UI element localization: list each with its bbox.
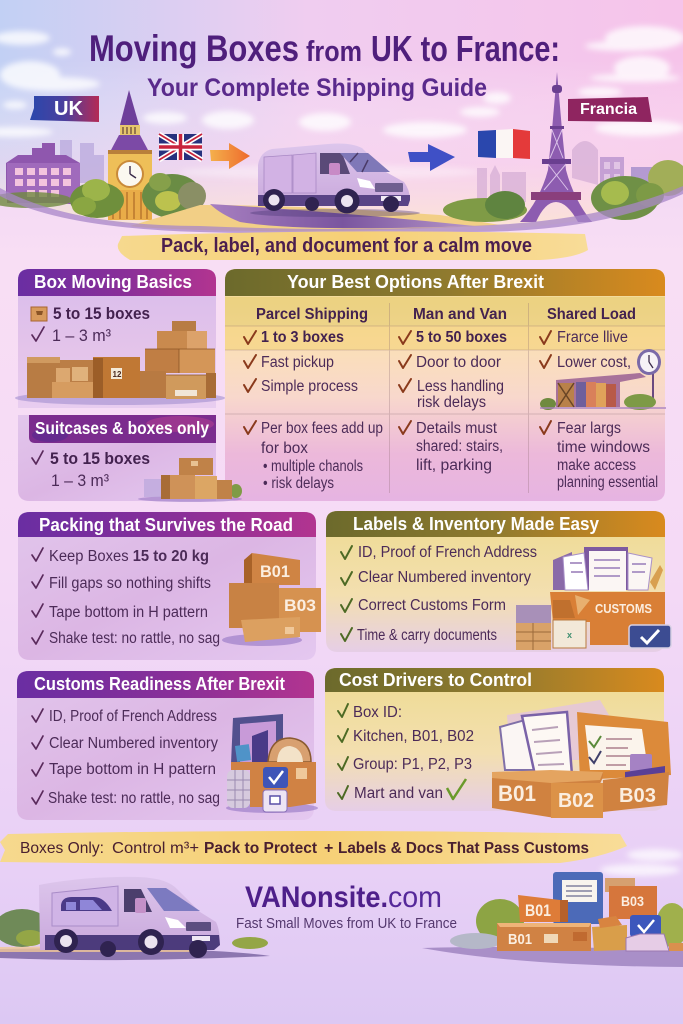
illustration: footer boxes and documents: [450, 872, 683, 951]
panel: Customs Readiness After Brexit: [17, 671, 318, 820]
checklist: Tape bottom in H pattern: [49, 761, 216, 778]
swoosh: [0, 186, 683, 234]
heading: [17, 671, 314, 698]
text: volume: 1 – 3 m³: [51, 471, 109, 490]
summary band: [0, 831, 627, 864]
illustration: labelled boxes: B01: [260, 562, 290, 581]
checklist: Mart and van: [354, 785, 443, 802]
icon: Eiffel Tower: [520, 72, 592, 222]
checklist: Keep Boxes 15 to 20 kg: [49, 548, 209, 565]
text: 5 to 15 boxes: 5 to 15 boxes: [53, 305, 150, 323]
column: Shared Load: Fear largs: [557, 420, 621, 437]
title: Moving Boxes: [89, 28, 299, 69]
checklist: Tape bottom in H pattern: [49, 604, 208, 621]
checklist: Correct Customs Form: [358, 597, 506, 614]
heading: Customs Readiness After Brexit: [34, 674, 285, 694]
column: Parcel Shipping: Simple process: [261, 378, 358, 395]
subtitle: Your Complete Shipping Guide: [147, 74, 487, 102]
checklist: Clear Numbered inventory: [49, 735, 218, 752]
panel: Labels and Inventory Made Easy: [326, 511, 671, 652]
column: Man and Van: Man and Van: [413, 306, 507, 323]
illustration: customs box: x: [567, 630, 572, 640]
summary band: Pack to Protect: [204, 840, 318, 857]
column: Man and Van: 5 to 50 boxes: [416, 329, 507, 346]
brand: VANonsite.com: com: [388, 881, 442, 914]
column: Man and Van: shared: stairs,: [416, 438, 503, 455]
banner: UK: [30, 96, 99, 122]
tagline band: Pack, label, and document for a calm move: [161, 235, 532, 257]
banner: UK: UK: [54, 98, 84, 120]
column: Parcel Shipping: Fast pickup: [261, 354, 334, 371]
column: Man and Van: Details must: [416, 420, 498, 437]
title: [89, 28, 560, 69]
illustration: footer boxes and documents: B01: [525, 901, 551, 920]
hero scene: [0, 0, 683, 234]
title: from: [306, 36, 362, 68]
heading: Box Moving Basics: [34, 272, 192, 292]
summary band: Labels & Docs That Pass Customs: [338, 840, 589, 857]
skyline: Paris rooftops: [477, 141, 657, 202]
illustration: paperwork and boxes: B01: [498, 781, 536, 806]
checklist: Shake test: no rattle, no sag: [49, 630, 220, 647]
brand: VANonsite.com: VANonsite.: [245, 881, 388, 914]
column: Shared Load: time windows: [557, 439, 650, 456]
checklist: ID, Proof of French Address: [49, 708, 217, 725]
column: Parcel Shipping: [244, 306, 383, 492]
column: Parcel Shipping: Per box fees add up: [261, 420, 383, 437]
heading: [29, 415, 216, 443]
illustration: footer boxes and documents: B03: [621, 893, 644, 909]
illustration: paperwork and boxes: [492, 700, 671, 818]
column: Shared Load: planning essential: [557, 474, 658, 491]
column: Shared Load: make access: [557, 457, 636, 474]
icon: large green check: [447, 779, 466, 799]
text: boxes count: 5 to 15 boxes: [50, 450, 150, 468]
skyline: distant towers left: [60, 140, 104, 185]
column: Shared Load: Shared Load: [547, 306, 636, 323]
illustration: small boxes: [138, 458, 242, 502]
column: Parcel Shipping: Parcel Shipping: [256, 306, 368, 323]
checklist: [32, 708, 220, 807]
heading: [326, 511, 665, 537]
arrow: orange: [210, 143, 250, 169]
checklist: Group: P1, P2, P3: [353, 756, 472, 773]
checklist: Fill gaps so nothing shifts: [49, 575, 211, 592]
heading: [225, 269, 665, 296]
checklist: [338, 704, 474, 802]
heading: Your Best Options After Brexit: [287, 271, 544, 292]
illustration: customs box: CUSTOMS: [595, 602, 652, 616]
icon: UK flag: [159, 134, 202, 160]
illustration: box pile: 12: [112, 370, 122, 379]
tagline band: [118, 231, 588, 260]
column header band: [225, 297, 665, 326]
column: Man and Van: Door to door: [416, 354, 501, 371]
panel: Box Moving Basics: [15, 269, 225, 408]
illustration: customs kit: [226, 714, 318, 813]
column: Shared Load: Frarce llive: [557, 329, 628, 346]
panel: Cost Drivers to Control: [325, 668, 671, 818]
checklist: Time & carry documents: [357, 627, 497, 644]
van: hero: [250, 144, 420, 217]
heading: [18, 269, 216, 296]
column: Man and Van: risk delays: [417, 394, 486, 411]
illustration: box pile: [15, 321, 225, 405]
banner: Francia: [568, 97, 652, 122]
trees right: [443, 160, 683, 222]
checklist: Shake test: no rattle, no sag: [48, 790, 220, 807]
heading: [325, 668, 664, 692]
illustration: paperwork and boxes: B03: [619, 785, 656, 807]
checklist: [341, 544, 537, 644]
column: Parcel Shipping: • multiple chanols: [263, 458, 363, 475]
building: purple townhouse: [6, 143, 80, 205]
row band: [225, 326, 665, 350]
illustration: labelled boxes: [222, 553, 321, 646]
icon: clock tower: [108, 90, 152, 220]
column: Parcel Shipping: for box: [261, 440, 308, 457]
summary band: +: [324, 840, 333, 857]
icon: small box: [31, 307, 47, 321]
column: Parcel Shipping: 1 to 3 boxes: [261, 329, 344, 346]
footer clouds and ground: [0, 849, 683, 967]
heading: Packing that Survives the Road: [39, 515, 293, 535]
checklist: Box ID:: [353, 704, 402, 721]
icon: French flag: [478, 129, 530, 159]
heading: Labels & Inventory Made Easy: [353, 514, 599, 534]
panel: Suitcases and boxes only: [18, 415, 242, 502]
checklist: Clear Numbered inventory: [358, 569, 531, 586]
illustration: customs box: [516, 547, 671, 650]
illustration: footer boxes and documents: B01: [508, 931, 532, 948]
banner: Francia: Francia: [580, 101, 637, 118]
heading: Suitcases & boxes only: [35, 418, 209, 438]
illustration: warehouse and clock: [540, 349, 666, 410]
checklist: [32, 548, 220, 647]
column: Man and Van: Less handling: [417, 378, 504, 395]
illustration: labelled boxes: B03: [284, 596, 316, 615]
checklist: ID, Proof of French Address: [358, 544, 537, 561]
text: 1 to 3 m3: 1 – 3 m³: [52, 326, 111, 345]
column: Man and Van: lift, parking: [416, 457, 492, 474]
panel: Your Best Options After Brexit: [225, 269, 666, 501]
column: Shared Load: Lower cost,: [557, 354, 631, 371]
summary band: Control m³+: [112, 840, 199, 857]
title: UK to France:: [371, 28, 560, 69]
arrow: blue: [408, 144, 455, 171]
illustration: paperwork and boxes: B02: [558, 790, 594, 812]
checklist: Kitchen, B01, B02: [353, 728, 474, 745]
column: Parcel Shipping: • risk delays: [263, 475, 334, 492]
brand tagline: Fast Small Moves from UK to France: [236, 915, 457, 932]
column: Man and Van: [399, 306, 507, 474]
panel: Packing that Survives the Road: [18, 512, 321, 660]
trees left: [0, 173, 206, 218]
column: Shared Load: [540, 306, 658, 491]
icon: footer trees left: [0, 909, 268, 949]
summary band: Boxes Only:: [20, 840, 104, 857]
heading: Cost Drivers to Control: [339, 669, 532, 690]
road: [130, 204, 500, 231]
van: footer: [39, 877, 220, 958]
